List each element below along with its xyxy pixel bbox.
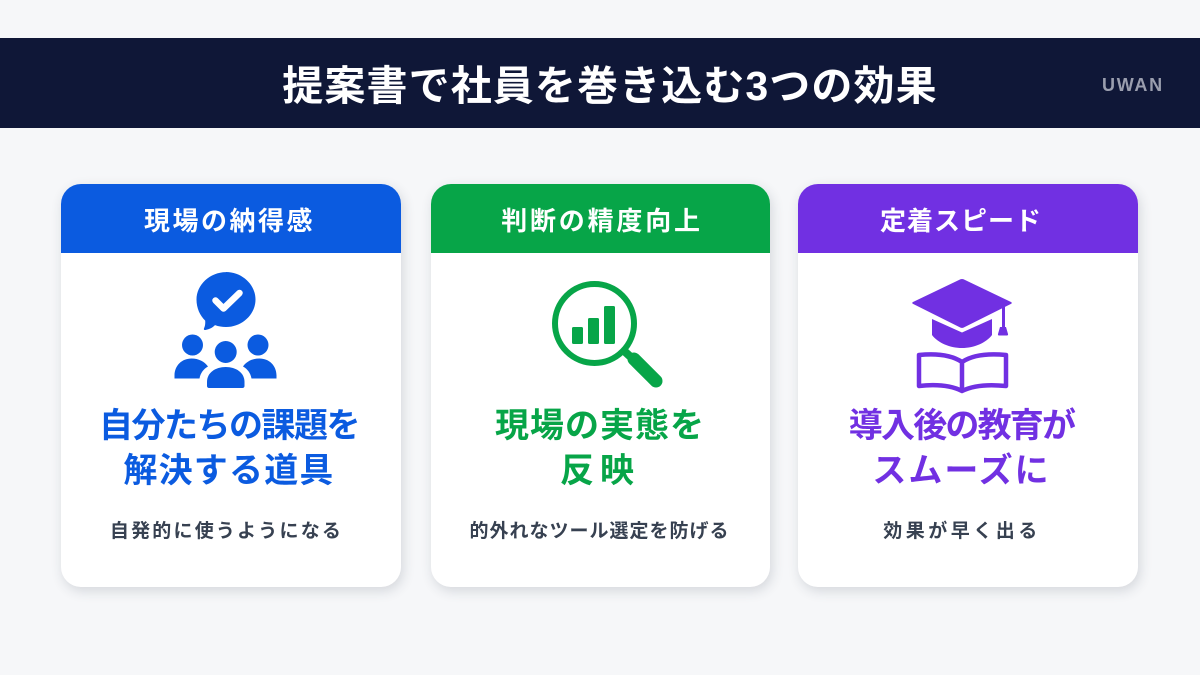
main message: 導入後の教育が (849, 407, 1074, 445)
main message (495, 407, 705, 490)
panel heading (61, 184, 401, 253)
title: 提案書で社員を巻き込む3つの効果 (282, 63, 938, 109)
main message: 反映 (560, 452, 640, 490)
main message (849, 407, 1076, 490)
panel heading (798, 184, 1138, 253)
supporting text: 自発的に使うようになる (110, 521, 343, 542)
logo: UWAN (1102, 75, 1164, 95)
main message: 解決する道具 (123, 452, 335, 490)
panel: 現場の納得感 (61, 184, 401, 587)
panel: 判断の精度向上 (431, 184, 770, 587)
panel heading (431, 184, 770, 253)
icon: magnifying glass with bar chart (552, 281, 662, 388)
panel: 定着スピード (798, 184, 1138, 587)
supporting text: 効果が早く出る (883, 521, 1041, 542)
main message: スムーズに (872, 452, 1051, 490)
panel heading: 現場の納得感 (144, 206, 315, 236)
main message: 自分たちの課題を (99, 407, 359, 445)
main message: 現場の実態を (495, 407, 705, 445)
main message (99, 407, 359, 490)
panel heading: 定着スピード (880, 206, 1042, 236)
icon: people with check speech bubble (174, 272, 276, 388)
panel heading: 判断の精度向上 (501, 206, 703, 236)
supporting text: 的外れなツール選定を防げる (469, 521, 730, 542)
title banner (0, 38, 1200, 128)
icon: graduation cap and open book (912, 279, 1012, 394)
